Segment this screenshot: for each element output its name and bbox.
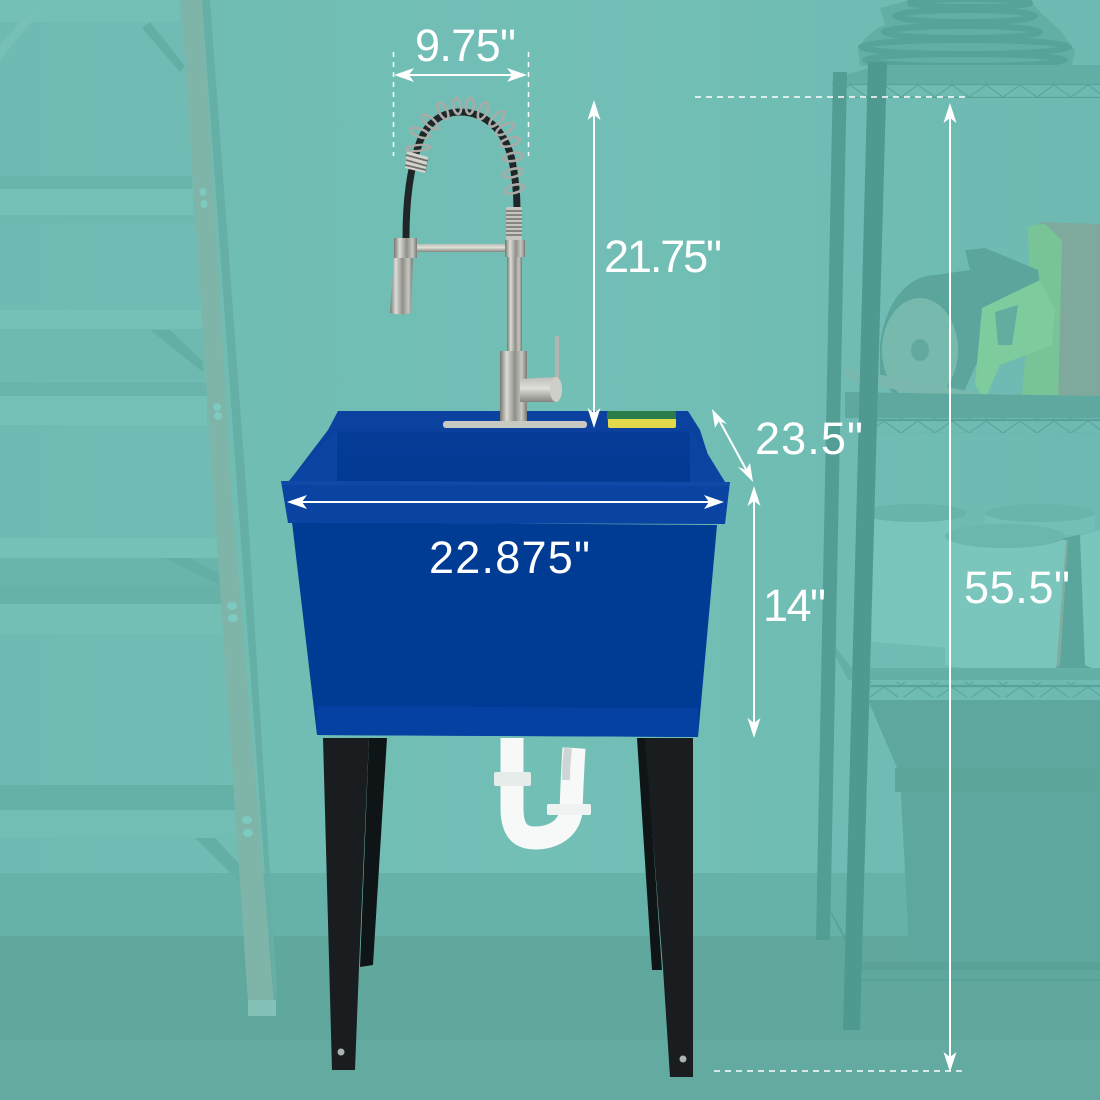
arrow: tub height (748, 486, 760, 738)
left can (868, 515, 950, 648)
bottom band (317, 706, 698, 737)
ladder side rail (202, 0, 277, 1015)
dashed guide: top of overall height (695, 96, 965, 98)
front shelf post (843, 62, 887, 1030)
hose (406, 112, 517, 238)
storage crate (868, 700, 1100, 968)
spout coil (506, 207, 522, 240)
right leg bolt (680, 1056, 686, 1062)
crate lid edge (895, 768, 1100, 792)
drain pipe (494, 738, 591, 838)
dashed guides: faucet reach (394, 52, 528, 156)
background: wire shelving and stored items (816, 0, 1100, 1030)
tub body (292, 522, 717, 737)
ladder front rail (181, 0, 275, 1015)
left slip nut (494, 772, 531, 786)
arrow: overall height (944, 103, 956, 1072)
ladder rungs (0, 0, 243, 885)
left leg (323, 738, 387, 1070)
sprayer head (390, 258, 413, 314)
basin left wall (288, 432, 337, 482)
faucet base (500, 351, 527, 423)
arrow: faucet reach (394, 68, 527, 82)
left leg bolt (338, 1048, 344, 1056)
sink tub (281, 411, 730, 737)
spout (507, 240, 522, 355)
ladder foot (248, 1000, 276, 1016)
third shelf (822, 630, 1100, 697)
basin interior (337, 432, 690, 482)
basin right wall (690, 432, 725, 482)
deck plate (443, 421, 587, 428)
arrow: sink depth (712, 409, 753, 482)
second shelf (845, 392, 1100, 433)
right slip nut (547, 804, 591, 815)
spout collar (505, 240, 525, 257)
rear deck (290, 411, 716, 480)
hose coil (858, 0, 1075, 66)
connecting arm (416, 244, 508, 252)
back shelf post (816, 72, 847, 940)
handle lever (555, 336, 559, 380)
dashed guide: bottom of overall height (714, 1070, 965, 1072)
circular saw (845, 248, 1055, 405)
rear can (985, 510, 1095, 535)
arrow: sink width (287, 495, 724, 509)
label: 23.5: 23.5" (755, 413, 863, 464)
pipe shading (566, 748, 568, 780)
right can (1080, 530, 1100, 672)
upper hose coil (405, 144, 430, 173)
top shelf (832, 65, 1100, 98)
sponge (607, 411, 676, 428)
spring loops (409, 97, 525, 195)
paint cans (863, 504, 1100, 680)
front rim (281, 481, 730, 524)
sprayer collar (394, 238, 417, 258)
arrow: faucet height (588, 100, 600, 428)
label: 9.75: 9.75" (415, 20, 516, 71)
label: 22.875: 22.875" (429, 532, 590, 583)
bottom shelf (816, 885, 1100, 985)
background: ladder (0, 0, 277, 1016)
faucet (390, 97, 587, 428)
front can (945, 538, 1066, 680)
box on shelf (1022, 222, 1100, 412)
can side edge and gap (1056, 530, 1100, 672)
ladder rivets (200, 188, 253, 837)
label: 21.75: 21.75" (604, 231, 722, 282)
label: 14: 14" (763, 580, 826, 631)
handle body (520, 377, 562, 402)
label: 55.5: 55.5" (964, 562, 1070, 613)
right leg (637, 738, 693, 1077)
